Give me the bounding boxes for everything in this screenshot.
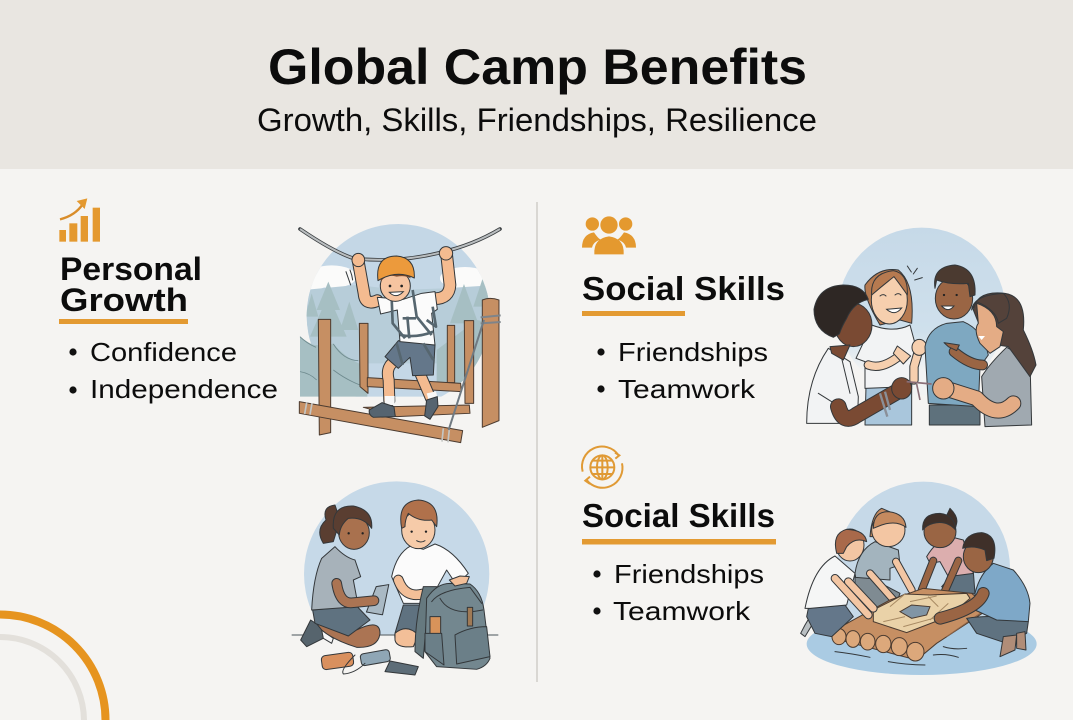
subtitle: Growth, Skills, Friendships, Resilience [257, 102, 817, 138]
panel: personal growth text [59, 198, 278, 404]
ground line [292, 633, 498, 637]
blue circle backdrop [837, 482, 1010, 655]
illustration: kids packing backpack [292, 481, 498, 675]
water ripples [835, 647, 967, 665]
loose items: flasks and phone [321, 649, 418, 675]
blue circle backdrop [842, 228, 1004, 364]
boy climbing [346, 247, 453, 419]
heading: personal growth [60, 251, 202, 318]
decorative corner arcs [0, 614, 106, 720]
water pool [807, 613, 1037, 675]
bracelet between hands [907, 382, 932, 400]
bullet list: social skills: Friendships [618, 337, 768, 367]
heading underline [582, 539, 776, 544]
blonde girl [855, 508, 912, 612]
heading underline [582, 311, 685, 316]
illustration: four friends sharing bracelet [807, 228, 1036, 427]
heading: social skills: Social Skills [582, 497, 775, 534]
heading: personal growth: Personal [60, 251, 202, 287]
bullet list: social skills: Teamwork [613, 596, 751, 626]
smiling boy in blue [925, 265, 988, 425]
header band [0, 0, 1073, 169]
wooden posts and beams [299, 298, 501, 443]
bullet list: social skills: Friendships [614, 559, 764, 589]
icon: group of people [582, 216, 636, 254]
bullet list: social skills: Teamwork [618, 374, 756, 404]
heading: personal growth: Growth [60, 282, 188, 318]
girl with long hair [933, 293, 1036, 427]
icon: globe with arrows [582, 447, 622, 488]
panel: social skills text top [582, 216, 785, 404]
icon: rising bar chart [59, 198, 100, 242]
boy with curly hair [807, 285, 912, 423]
raft with puzzle [832, 588, 990, 661]
bullet list: personal growth [69, 337, 278, 404]
panel: social skills text bottom [582, 447, 776, 626]
scenery: sky, clouds and forest [300, 224, 488, 397]
bullet list: personal growth: Confidence [90, 337, 237, 367]
girl with bottle [301, 505, 390, 647]
bullet list: social skills [593, 559, 764, 626]
heading underline [59, 319, 188, 324]
backpack [415, 576, 490, 669]
blue circle backdrop [304, 481, 490, 634]
laughing girl [856, 269, 927, 425]
heading: social skills: Social Skills [582, 270, 785, 307]
rope overhead [300, 229, 500, 260]
bullet list: personal growth: Independence [90, 374, 278, 404]
boy with backpack [392, 500, 468, 647]
illustration: boy on ropes course [298, 224, 502, 444]
boy in blue [940, 533, 1030, 657]
illustration: team solving raft puzzle [801, 482, 1037, 675]
sparkle lines [907, 266, 922, 280]
girl in pink [922, 508, 975, 598]
bullet list: social skills [597, 337, 768, 404]
boy in white [801, 529, 873, 637]
title: Global Camp Benefits [268, 39, 807, 95]
